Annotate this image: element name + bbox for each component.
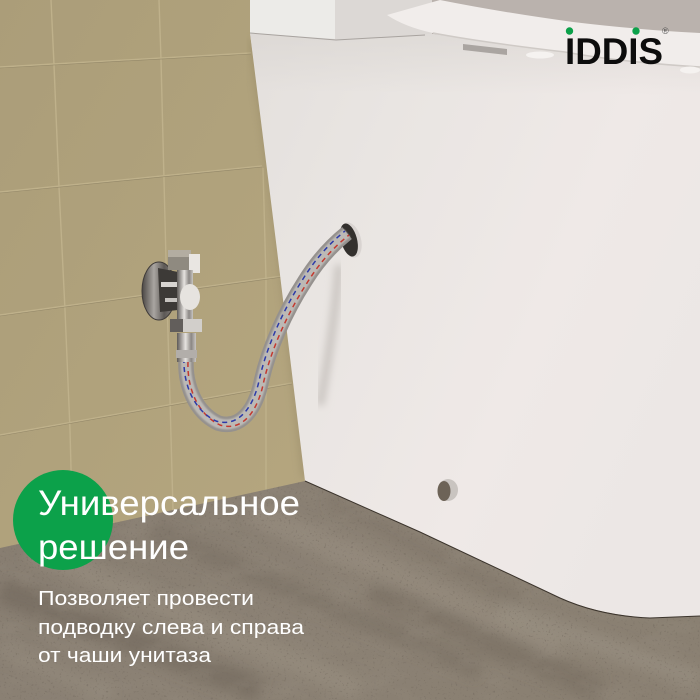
side plug on bowl (438, 479, 458, 501)
toilet bowl body (250, 33, 700, 618)
toilet seat (387, 0, 700, 74)
floor (0, 470, 700, 700)
description text: от чаши унитаза (38, 645, 212, 667)
IDDIS logo: IDDIS (565, 31, 663, 72)
heading: Универсальное (38, 484, 300, 523)
description text: подводку слева и справа (38, 617, 305, 639)
hose outlet hole (337, 220, 365, 260)
IDDIS logo: ® (662, 26, 669, 36)
tiled wall (0, 0, 320, 560)
heading (38, 484, 300, 567)
description text: Позволяет провести (38, 588, 254, 610)
toilet tank and back area (250, 0, 700, 70)
shadow of the hose on the bowl (320, 265, 339, 405)
wall valve (142, 250, 202, 362)
braided flexible hose (184, 231, 349, 426)
heading: решение (38, 528, 189, 567)
description text (38, 588, 305, 667)
green accent circle (13, 470, 113, 570)
